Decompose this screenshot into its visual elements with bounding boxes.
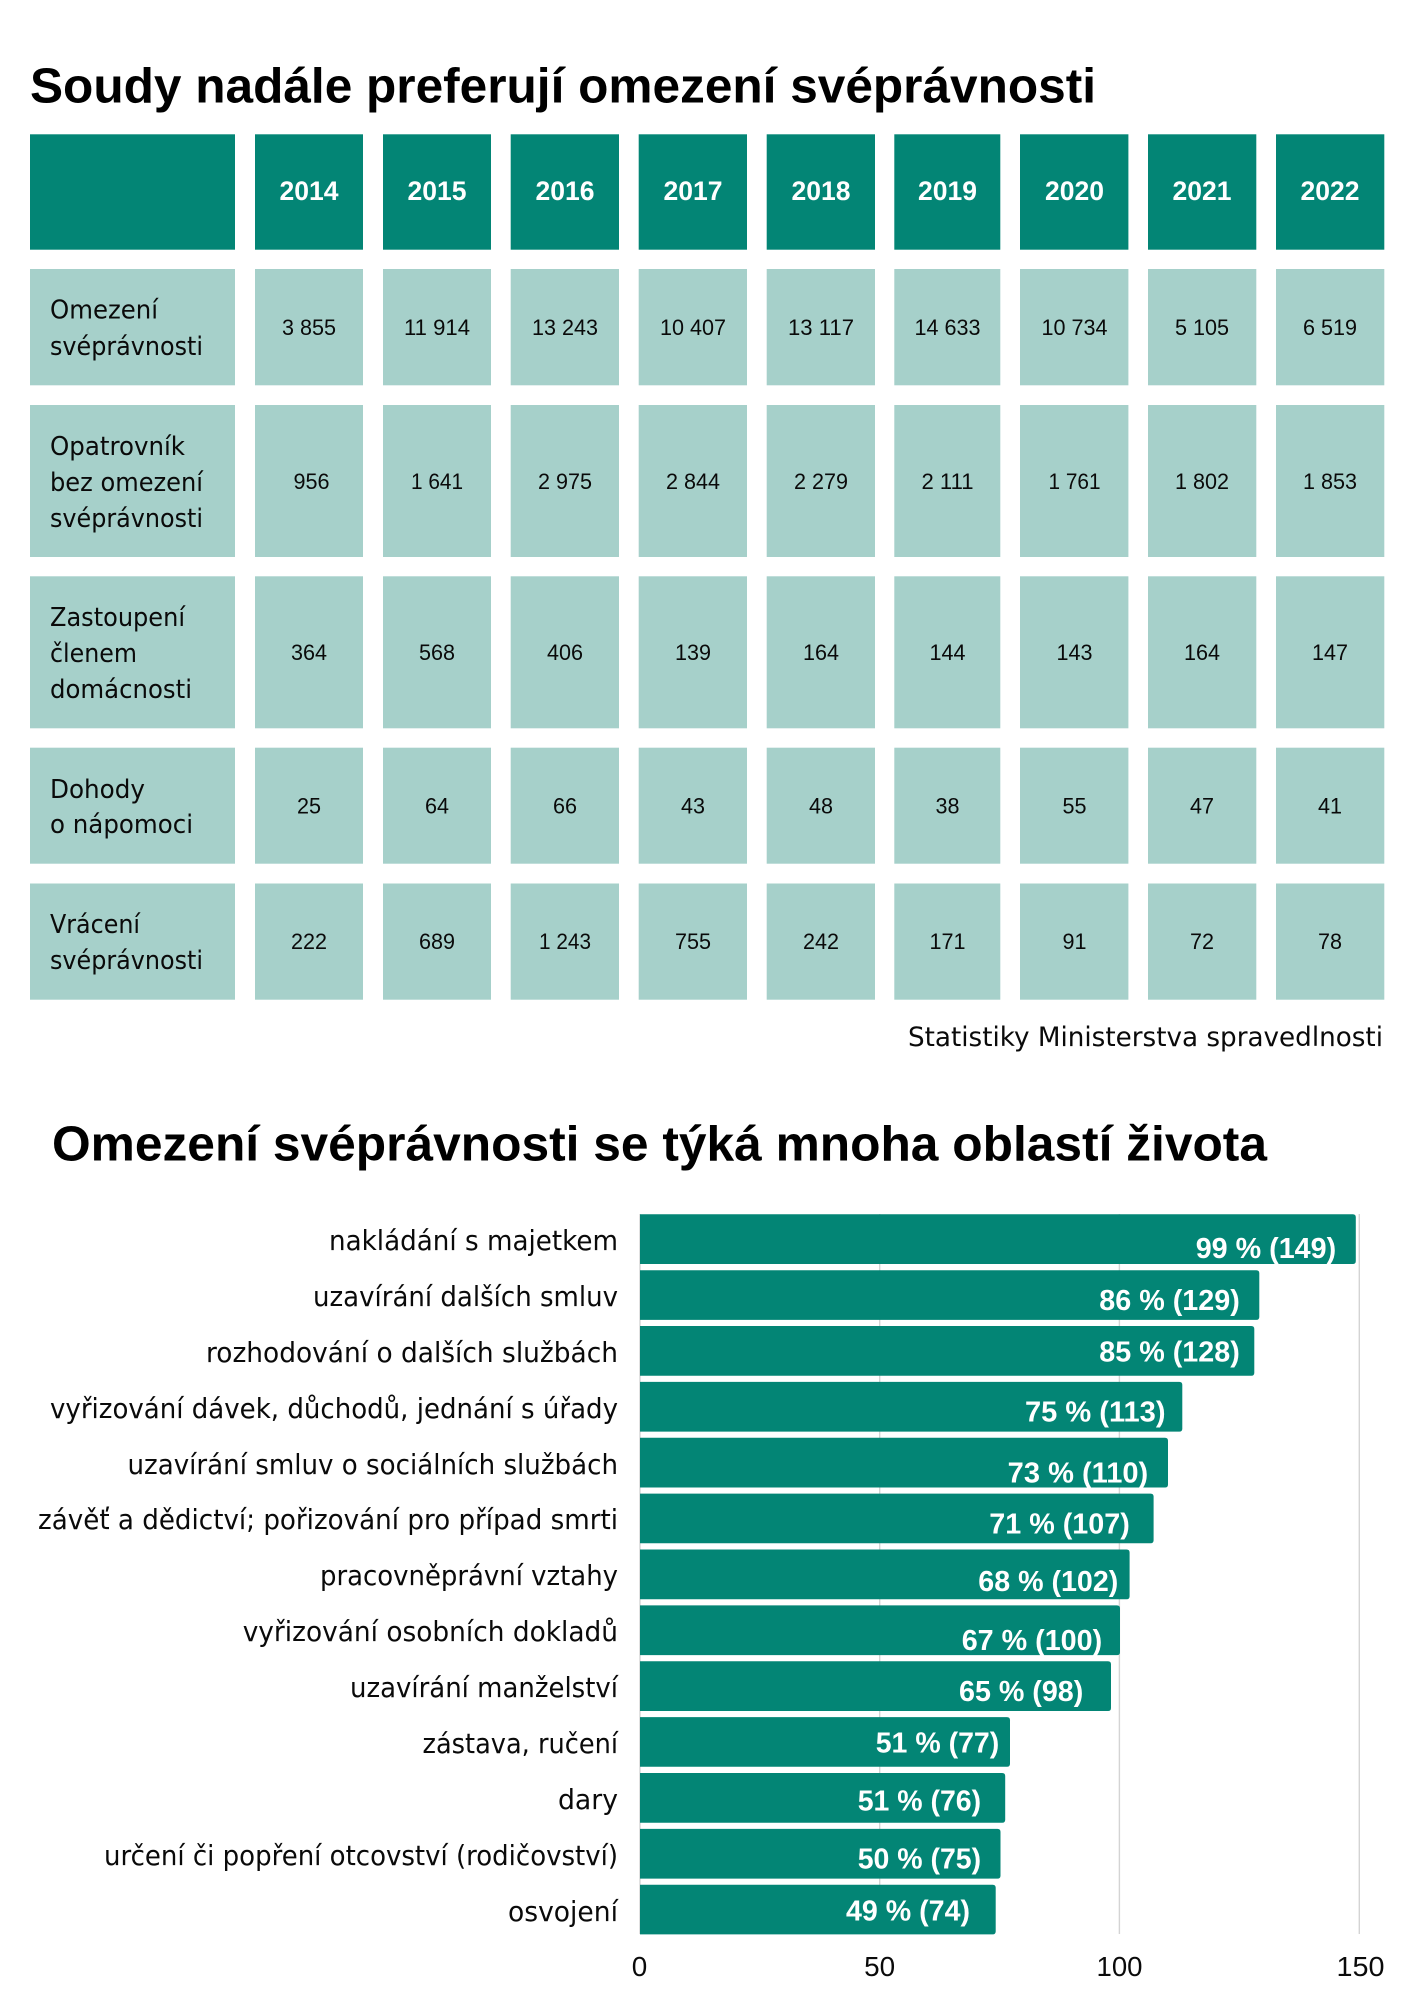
table row: Vrácení svéprávnosti: 242 <box>803 929 839 954</box>
table row: Dohody o nápomoci: 41 <box>1318 794 1342 818</box>
table row: Zastoupení členem domácnosti: 406 <box>547 640 583 665</box>
bar: uzavírání smluv o sociálních službách: 73 % (110) <box>1008 1458 1148 1490</box>
table header row with years: 2022 <box>1300 176 1360 206</box>
bar: vyřizování dávek, důchodů, jednání s úřady: 75 % (113) <box>1025 1397 1166 1429</box>
bar: rozhodování o dalších službách <box>206 1326 1254 1376</box>
bar: nakládání s majetkem: nakládání s majetkem <box>329 1225 618 1257</box>
x axis tick labels <box>632 1951 1384 1982</box>
bar: osvojení: osvojení <box>508 1896 619 1928</box>
bar: uzavírání manželství: uzavírání manželství <box>350 1672 619 1704</box>
table row: Opatrovník bez omezení svéprávnosti: bez omezení <box>50 468 204 498</box>
bar: pracovněprávní vztahy <box>320 1550 1130 1599</box>
table row: Omezení svéprávnosti <box>30 269 1384 385</box>
bar: nakládání s majetkem: 99 % (149) <box>1196 1233 1336 1265</box>
bar: uzavírání manželství: 65 % (98) <box>959 1676 1083 1708</box>
table row: Omezení svéprávnosti: 13 117 <box>788 315 854 340</box>
table row: Zastoupení členem domácnosti: 139 <box>675 640 711 665</box>
bar: uzavírání dalších smluv: 86 % (129) <box>1099 1285 1240 1317</box>
bar: osvojení: 49 % (74) <box>846 1895 970 1927</box>
table header row with years: 2017 <box>664 176 722 206</box>
table row: Dohody o nápomoci: 55 <box>1062 794 1086 818</box>
bar: nakládání s majetkem <box>329 1214 1356 1265</box>
table row: Zastoupení členem domácnosti: 164 <box>1184 640 1220 665</box>
table row: Vrácení svéprávnosti <box>30 884 1384 1000</box>
table row: Opatrovník bez omezení svéprávnosti: 1 802 <box>1175 469 1229 494</box>
x axis tick labels: 150 <box>1336 1951 1384 1982</box>
bar: určení či popření otcovství (rodičovství): určení či popření otcovství (rodičovství) <box>104 1840 618 1872</box>
table row: Vrácení svéprávnosti: 1 243 <box>539 929 591 954</box>
bar: závěť a dědictví; pořizování pro případ smrti: závěť a dědictví; pořizování pro případ smrti <box>38 1504 618 1536</box>
table row: Dohody o nápomoci: Dohody <box>50 775 145 805</box>
table row: Opatrovník bez omezení svéprávnosti: 1 641 <box>411 469 463 494</box>
table header row with years: 2016 <box>536 176 594 206</box>
table row: Omezení svéprávnosti: 3 855 <box>282 315 336 340</box>
table row: Dohody o nápomoci: 43 <box>681 794 705 818</box>
table header row with years: 2015 <box>408 176 466 206</box>
table row: Vrácení svéprávnosti: 72 <box>1190 929 1214 954</box>
table row: Omezení svéprávnosti: 11 914 <box>404 315 470 340</box>
bar: vyřizování osobních dokladů <box>243 1605 1120 1657</box>
table row: Omezení svéprávnosti: 14 633 <box>914 315 980 340</box>
bar: dary: dary <box>558 1784 618 1816</box>
table row: Opatrovník bez omezení svéprávnosti: 2 844 <box>666 469 720 494</box>
table row: Zastoupení členem domácnosti: 143 <box>1056 640 1092 665</box>
table row: Dohody o nápomoci <box>30 748 1384 864</box>
table header row with years: 2021 <box>1172 176 1232 206</box>
table row: Omezení svéprávnosti: 5 105 <box>1175 315 1229 340</box>
table header row with years: 2020 <box>1045 176 1104 206</box>
bar: vyřizování osobních dokladů: vyřizování osobních dokladů <box>243 1616 618 1648</box>
bar: závěť a dědictví; pořizování pro případ smrti: 71 % (107) <box>989 1509 1130 1541</box>
bar: vyřizování dávek, důchodů, jednání s úřady: vyřizování dávek, důchodů, jednání s úřady <box>50 1393 618 1425</box>
x axis tick labels: 0 <box>632 1951 647 1982</box>
table row: Omezení svéprávnosti: svéprávnosti <box>50 332 203 362</box>
bar: zástava, ručení <box>422 1717 1010 1767</box>
table row: Zastoupení členem domácnosti: 144 <box>930 640 966 665</box>
title: chart heading: Omezení svéprávnosti se týká mnoha oblastí života <box>52 1118 1268 1172</box>
table row: Omezení svéprávnosti: 6 519 <box>1303 315 1357 340</box>
bar: rozhodování o dalších službách: rozhodování o dalších službách <box>206 1337 618 1369</box>
bar: uzavírání manželství <box>350 1661 1111 1711</box>
table row: Opatrovník bez omezení svéprávnosti: 1 761 <box>1048 469 1100 494</box>
table row: Zastoupení členem domácnosti: členem <box>50 639 137 669</box>
table row: Zastoupení členem domácnosti: Zastoupení <box>50 603 186 633</box>
table row: Vrácení svéprávnosti: 689 <box>419 929 455 954</box>
panel: statistics table <box>30 134 1384 1000</box>
table row: Opatrovník bez omezení svéprávnosti: 1 853 <box>1303 469 1357 494</box>
table row: Dohody o nápomoci: 48 <box>809 794 833 818</box>
table row: Vrácení svéprávnosti: svéprávnosti <box>50 946 203 976</box>
table row: Vrácení svéprávnosti: 91 <box>1062 929 1086 954</box>
table row: Dohody o nápomoci: 66 <box>553 794 577 818</box>
table row: Opatrovník bez omezení svéprávnosti: 2 111 <box>922 469 974 494</box>
bar: určení či popření otcovství (rodičovství): 50 % (75) <box>858 1844 981 1876</box>
table header row with years: 2014 <box>280 176 338 206</box>
bar: uzavírání smluv o sociálních službách: uzavírání smluv o sociálních službách <box>128 1449 618 1481</box>
table row: Opatrovník bez omezení svéprávnosti: 2 279 <box>794 469 848 494</box>
table row: Opatrovník bez omezení svéprávnosti: 2 975 <box>538 469 592 494</box>
bar: závěť a dědictví; pořizování pro případ smrti <box>38 1494 1154 1543</box>
table row: Zastoupení členem domácnosti: 364 <box>291 640 327 665</box>
title: table heading: Soudy nadále preferují omezení svéprávnosti <box>30 60 1096 114</box>
table row: Omezení svéprávnosti: Omezení <box>50 296 159 326</box>
table header row with years <box>30 134 1384 250</box>
bar: pracovněprávní vztahy: 68 % (102) <box>978 1566 1118 1598</box>
x axis tick labels: 50 <box>864 1951 895 1982</box>
table row: Zastoupení členem domácnosti: 568 <box>419 640 455 665</box>
table row: Dohody o nápomoci: 38 <box>936 794 960 818</box>
bar: zástava, ručení: zástava, ručení <box>422 1728 619 1760</box>
table row: Vrácení svéprávnosti: 222 <box>291 929 327 954</box>
table row: Zastoupení členem domácnosti: 164 <box>803 640 839 665</box>
bar: osvojení <box>508 1885 996 1934</box>
x axis tick labels: 100 <box>1096 1951 1142 1982</box>
bar: dary <box>558 1773 1005 1823</box>
table row: Dohody o nápomoci: 64 <box>425 794 449 818</box>
table row: Omezení svéprávnosti: 13 243 <box>532 315 598 340</box>
table row: Zastoupení členem domácnosti: domácnosti <box>50 675 192 705</box>
bar: vyřizování osobních dokladů: 67 % (100) <box>962 1625 1102 1657</box>
source note: Statistiky Ministerstva spravedlnosti <box>908 1022 1383 1053</box>
table header row with years: 2019 <box>918 176 977 206</box>
table row: Dohody o nápomoci: 47 <box>1190 794 1214 818</box>
table row: Omezení svéprávnosti: 10 734 <box>1042 315 1108 340</box>
table row: Omezení svéprávnosti: 10 407 <box>660 315 726 340</box>
bar: pracovněprávní vztahy: pracovněprávní vztahy <box>320 1560 618 1592</box>
bar: rozhodování o dalších službách: 85 % (128) <box>1099 1337 1240 1369</box>
bar: dary: 51 % (76) <box>858 1785 981 1817</box>
bar: zástava, ručení: 51 % (77) <box>876 1727 999 1759</box>
table row: Zastoupení členem domácnosti <box>30 576 1384 728</box>
bar: určení či popření otcovství (rodičovství) <box>104 1829 1000 1879</box>
table row: Vrácení svéprávnosti: Vrácení <box>50 910 141 940</box>
table row: Opatrovník bez omezení svéprávnosti: svéprávnosti <box>50 504 203 534</box>
table row: Vrácení svéprávnosti: 755 <box>675 929 711 954</box>
bar: uzavírání dalších smluv <box>313 1270 1259 1320</box>
table row: Zastoupení členem domácnosti: 147 <box>1312 640 1348 665</box>
bar chart: areas of life <box>38 1214 1384 1982</box>
table row: Vrácení svéprávnosti: 78 <box>1318 929 1342 954</box>
table row: Opatrovník bez omezení svéprávnosti <box>30 405 1384 557</box>
table row: Dohody o nápomoci: 25 <box>297 794 321 818</box>
table row: Vrácení svéprávnosti: 171 <box>930 929 966 954</box>
bar: vyřizování dávek, důchodů, jednání s úřady <box>50 1382 1182 1432</box>
table row: Opatrovník bez omezení svéprávnosti: 956 <box>294 469 330 494</box>
table row: Dohody o nápomoci: o nápomoci <box>50 810 193 840</box>
bar: uzavírání smluv o sociálních službách <box>128 1438 1168 1490</box>
table header row with years: 2018 <box>792 176 850 206</box>
table row: Opatrovník bez omezení svéprávnosti: Opatrovník <box>50 432 185 462</box>
bar: uzavírání dalších smluv: uzavírání dalších smluv <box>313 1281 618 1313</box>
